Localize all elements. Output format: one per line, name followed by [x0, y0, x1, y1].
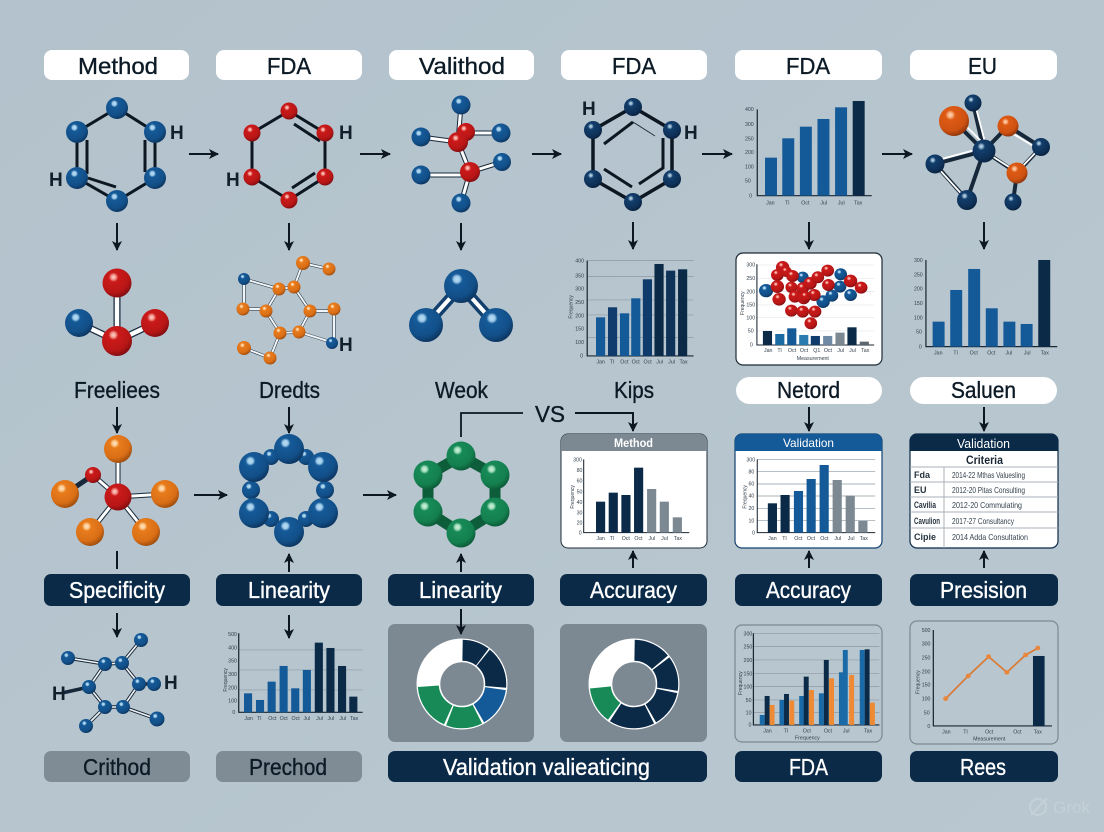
- panel: Validation chart: Tl: [782, 536, 787, 542]
- arrow: row 1 right 2: [360, 153, 390, 155]
- bar chart: EU: 100: [914, 315, 923, 321]
- pill: FDA 3: [735, 50, 882, 80]
- arrow: down to row 3 col 2: [288, 407, 290, 433]
- pill: Rees: [910, 751, 1058, 782]
- panel: Validation criteria table: Fda: [914, 470, 931, 480]
- pill: Linearity 2: [388, 574, 534, 606]
- pill: EU: [910, 50, 1057, 80]
- panel: Method chart: Jul: [648, 536, 655, 542]
- panel: scatter and bars: Oct: [788, 348, 797, 354]
- pill: Accuracy 1: Accuracy: [590, 577, 677, 603]
- pill: Prechod: Prechod: [249, 754, 327, 780]
- arrow: down col 6: [983, 222, 985, 249]
- bar chart: Prechod: [223, 632, 363, 722]
- panel: Validation criteria table: 2017-27 Consultancy: [952, 516, 1015, 526]
- arrow: row 3 right 2: [363, 494, 396, 496]
- pill: Accuracy 1: [560, 574, 707, 606]
- bar chart: EU: Jul: [1006, 350, 1012, 356]
- bar chart: Kips: Jan: [596, 360, 605, 366]
- bar chart: Kips: Frequency: [568, 295, 574, 319]
- panel: Validation chart: 300: [746, 457, 755, 463]
- molecule: orange ring: [236, 256, 353, 364]
- connector stem above Specificity: [116, 551, 118, 569]
- panel: scatter and bars: 150: [746, 303, 755, 309]
- bar chart: Prechod: Oct: [292, 716, 300, 722]
- bar chart: Kips: 0: [580, 353, 583, 359]
- panel: Validation chart: 40: [748, 494, 754, 500]
- bar chart: EU: 200: [914, 287, 923, 293]
- panel: Validation criteria table: Criteria: [966, 453, 1003, 467]
- molecule: red hexagon: [226, 102, 353, 208]
- panel: line and bar chart: Jan: [942, 730, 951, 736]
- panel: line and bar chart: 500: [922, 628, 931, 634]
- bar chart: Kips: Jul: [668, 360, 675, 366]
- bar chart: Kips: 300: [575, 287, 584, 293]
- panel: Validation criteria table: EU: [914, 485, 927, 495]
- bar chart: Prechod: 100: [228, 699, 237, 705]
- pill: Prechod: [216, 751, 362, 782]
- arrow: down to row 3 col 6: [983, 407, 985, 431]
- bar chart: FDA row 1: 0: [749, 193, 752, 199]
- molecule: red and blue trio: [65, 268, 169, 356]
- label: Kips: Kips: [614, 377, 654, 403]
- pill: Crithod: Crithod: [83, 754, 151, 780]
- panel: line and bar chart: Frequency: [915, 670, 922, 694]
- pill: EU: EU: [968, 53, 997, 79]
- VS comparison connector: VS: [535, 401, 565, 427]
- arrow: row 1 right 3: [532, 153, 561, 155]
- pill: Valithod: [389, 50, 534, 80]
- panel: Method chart: Jan: [596, 536, 605, 542]
- panel: Method chart: Tl: [610, 536, 614, 542]
- panel: grouped bar chart: Jan: [763, 729, 772, 735]
- panel: Validation chart: Jul: [834, 536, 841, 542]
- molecule: branched red and blue: [412, 96, 511, 212]
- pill: Validation valieaticing: Validation valieaticing: [443, 754, 650, 780]
- panel: Validation criteria table: 2012-20 Pitas Consulting: [952, 485, 1025, 495]
- molecule: blue hexagon: H: [170, 123, 184, 144]
- pill: Specificity: Specificity: [69, 577, 165, 603]
- pill: Rees: Rees: [960, 754, 1006, 780]
- bar chart: Prechod: 500: [228, 632, 237, 638]
- arrow: down col 5: [808, 222, 810, 249]
- bar chart: FDA row 1: Jul: [820, 201, 827, 207]
- bar chart: Prechod: Tax: [350, 716, 359, 722]
- panel: Method chart: 20: [577, 521, 583, 527]
- panel: Validation chart: Tax: [860, 536, 868, 542]
- panel: line and bar chart: 0: [927, 724, 930, 730]
- arrow: up to Method chart: [632, 551, 634, 568]
- pill: FDA 2: FDA: [612, 53, 657, 79]
- arrow: down to row 4 col 1: [116, 613, 118, 637]
- panel: scatter and bars: 50: [748, 329, 754, 335]
- panel: Method chart: [561, 434, 707, 548]
- panel: scatter and bars: 200: [746, 289, 755, 295]
- bar chart: FDA row 1: 300: [745, 122, 754, 128]
- panel: line and bar chart: Measurement: [973, 737, 1006, 743]
- panel: Method chart: 300: [573, 457, 582, 463]
- molecule: navy hexagon: [582, 98, 698, 211]
- bar chart: Prechod: 200: [228, 685, 237, 691]
- bar chart: Prechod: Frequency: [223, 668, 229, 692]
- bar chart: EU: Tl: [953, 350, 958, 356]
- bar chart: EU: 150: [914, 301, 923, 307]
- molecule: blue trio: [409, 269, 513, 342]
- panel: Validation chart: Oct: [794, 536, 803, 542]
- pill: FDA 1: [216, 50, 362, 80]
- panel: line and bar chart: 250: [922, 655, 931, 661]
- bar chart: FDA row 1: Tl: [785, 201, 789, 207]
- panel: line and bar chart: 150: [922, 683, 931, 689]
- panel: Method chart: 50: [577, 489, 583, 495]
- arrow: down col 3: [460, 223, 462, 250]
- panel: grouped bar chart: 250: [744, 645, 752, 651]
- panel: Method chart: 30: [577, 511, 583, 517]
- panel: grouped bar chart: Frequency: [738, 671, 744, 695]
- bar chart: Prechod: Oct: [280, 716, 288, 722]
- panel: scatter and bars: Jul: [849, 348, 856, 354]
- bar chart: EU: Oct: [970, 350, 978, 356]
- panel: line and bar chart: Tl: [963, 730, 968, 736]
- panel: Validation criteria table: Validation: [957, 436, 1010, 451]
- arrow: down to row 3 col 5: [808, 407, 810, 431]
- arrow: up to Validation chart: [808, 551, 810, 568]
- arrow: up to blue ring: [288, 554, 290, 572]
- bar chart: Prechod: 300: [228, 672, 237, 678]
- panel: scatter and bars: Oct: [800, 348, 809, 354]
- panel: scatter and bars: Q1: [813, 348, 820, 354]
- panel: Validation chart: 20: [748, 506, 754, 512]
- panel: Validation chart: 10: [748, 518, 754, 524]
- arrow: up to green ring: [460, 554, 462, 572]
- molecule: blue hexagon: [49, 97, 184, 212]
- molecule: red and orange star: [51, 435, 179, 546]
- VS comparison connector: [461, 401, 633, 437]
- panel: Validation criteria table: [910, 434, 1058, 548]
- bar chart: Prechod: Jul: [327, 716, 334, 722]
- bar chart: FDA row 1: 200: [745, 150, 754, 156]
- molecule: red hexagon: H: [339, 123, 353, 144]
- panel: grouped bar chart: 100: [744, 685, 752, 691]
- arrow: row 1 right 4: [702, 153, 732, 155]
- panel: Method chart: Tax: [674, 536, 682, 542]
- bar chart: FDA row 1: 250: [745, 137, 754, 143]
- panel: grouped bar chart: 10: [746, 711, 752, 717]
- watermark: Grok: [1030, 798, 1090, 817]
- panel: grouped bar chart: 50: [746, 698, 752, 704]
- panel: Validation chart: 60: [748, 482, 754, 488]
- pill: Saluen: [910, 377, 1057, 404]
- panel: scatter and bars: 0: [750, 343, 753, 349]
- panel: scatter and bars: Measurement: [797, 356, 829, 362]
- pill: Method: [44, 50, 189, 80]
- panel: Method chart: 80: [577, 468, 583, 474]
- panel: Method chart: Frequency: [570, 485, 576, 509]
- panel: line and bar chart: 100: [922, 697, 931, 703]
- bar chart: Kips: Oct: [632, 360, 640, 366]
- molecule: orange ring: H: [339, 335, 353, 356]
- pill: Accuracy 2: [735, 574, 882, 606]
- pill: Presision: Presision: [940, 577, 1027, 603]
- bar chart: Kips: Tax: [679, 360, 688, 366]
- label: Freeliees: Freeliees: [74, 377, 160, 403]
- label: Weok: Weok: [435, 377, 488, 403]
- panel: grouped bar chart: Frequency: [795, 735, 820, 741]
- pill: Valithod: Valithod: [419, 53, 505, 79]
- pill: Presision: [910, 574, 1058, 606]
- bar chart: Prechod: Jul: [304, 716, 310, 722]
- arrow: down into donut panel: [460, 609, 462, 634]
- pill: FDA 1: FDA: [267, 53, 312, 79]
- bar chart: FDA row 1: 400: [745, 107, 754, 113]
- panel: grouped bar chart: Tax: [864, 729, 873, 735]
- pill: Crithod: [44, 751, 190, 782]
- pill: Method: Method: [78, 53, 158, 79]
- panel: scatter and bars: 300: [746, 263, 755, 269]
- panel: donut chart 1: [388, 624, 534, 742]
- panel: grouped bar chart: [735, 625, 882, 742]
- panel: scatter and bars: Tl: [777, 348, 782, 354]
- bar chart: Kips: Jul: [656, 360, 663, 366]
- panel: line and bar chart: 300: [922, 642, 931, 648]
- bar chart: EU: 300: [914, 258, 923, 264]
- molecule: red hexagon: H: [226, 170, 240, 191]
- panel: Validation chart: Frequency: [742, 485, 748, 509]
- panel: scatter and bars: 100: [746, 315, 755, 321]
- bar chart: Kips: 350: [575, 273, 584, 279]
- panel: grouped bar chart: Oct: [803, 729, 811, 735]
- bar chart: EU: [914, 258, 1057, 356]
- bar chart: EU: 0: [919, 344, 922, 350]
- panel: Validation chart: [735, 434, 882, 548]
- panel: line and bar chart: 200: [922, 669, 931, 675]
- panel: grouped bar chart: 200: [744, 658, 752, 664]
- bar chart: Prechod: 400: [228, 645, 237, 651]
- pill: FDA 2: [561, 50, 707, 80]
- panel: Validation chart: Jul: [848, 536, 855, 542]
- bar chart: Kips: 150: [575, 327, 584, 333]
- arrow: down col 2: [288, 223, 290, 250]
- pill: Saluen: Saluen: [951, 377, 1016, 403]
- molecule: navy hexagon: H: [582, 99, 596, 120]
- bar chart: Prechod: Tl: [257, 716, 261, 722]
- bar chart: Prechod: Jan: [244, 716, 253, 722]
- arrow: up to criteria table: [983, 551, 985, 568]
- molecule: blue hexagon small: [52, 633, 178, 733]
- label: Dredts: Dredts: [259, 377, 320, 403]
- pill: Netord: Netord: [777, 377, 840, 403]
- bar chart: EU: Tax: [1041, 350, 1049, 356]
- panel: Method chart: Method: [614, 436, 653, 450]
- pill: Linearity 1: [216, 574, 362, 606]
- panel: scatter and bars: [736, 253, 882, 365]
- molecule: green ring: [414, 442, 510, 548]
- watermark: Grok: Grok: [1053, 798, 1090, 817]
- top header pills: [44, 50, 1057, 80]
- bar chart: Kips: 200: [575, 313, 584, 319]
- bar chart: Kips: 400: [575, 259, 584, 265]
- bar chart: Kips: 250: [575, 300, 584, 306]
- bar chart: FDA row 1: Tax: [854, 201, 863, 207]
- bar chart: Prechod: Jul: [316, 716, 323, 722]
- panel: Validation chart: Validation: [783, 436, 834, 450]
- panel: Validation criteria table: Cavilia: [914, 500, 937, 510]
- panel: grouped bar chart: Tl: [784, 729, 788, 735]
- pill: Linearity 2: Linearity: [419, 577, 502, 603]
- panel: line and bar chart: [910, 621, 1058, 744]
- panel: scatter and bars: Frequency: [740, 291, 746, 315]
- arrow: down to row 3 col 1: [116, 407, 118, 433]
- bar chart: FDA row 1: 100: [745, 164, 754, 170]
- panel: line and bar chart: Oct: [1013, 730, 1022, 736]
- molecule: blue ring: [239, 434, 338, 547]
- molecule: navy hexagon: H: [684, 123, 698, 144]
- panel: line and bar chart: 50: [924, 710, 930, 716]
- panel: grouped bar chart: Oct: [824, 729, 833, 735]
- bar chart: FDA row 1: Jul: [838, 201, 845, 207]
- bar chart: Prechod: Jul: [339, 716, 346, 722]
- bar chart: EU: Oct: [987, 350, 996, 356]
- panel: Validation criteria table: Cavulion: [914, 516, 940, 526]
- panel: donut chart 2: [560, 624, 707, 742]
- bar chart: Kips: Oct: [644, 360, 652, 366]
- panel: line and bar chart: Oct: [985, 730, 994, 736]
- panel: Validation chart: 0: [752, 531, 755, 537]
- bar chart: Prechod: 350: [228, 659, 237, 665]
- panel: scatter and bars: 250: [746, 276, 755, 282]
- arrow: down col 1: [116, 223, 118, 250]
- panel: Validation criteria table: 2014-22 Mthas Valuesling: [952, 470, 1025, 480]
- pill: FDA bottom: [735, 751, 882, 782]
- panel: Method chart: 40: [577, 500, 583, 506]
- bar chart: Kips: 100: [575, 340, 584, 346]
- pill: FDA bottom: FDA: [789, 754, 829, 780]
- pill: Linearity 1: Linearity: [248, 577, 330, 603]
- bar chart: EU: 250: [914, 272, 923, 278]
- panel: grouped bar chart: Jul: [843, 729, 850, 735]
- bar chart: FDA row 1: Jan: [766, 201, 775, 207]
- molecule: blue hexagon small: H: [52, 684, 66, 705]
- arrow: row 1 right 1: [189, 153, 218, 155]
- bar chart: Kips: [568, 259, 694, 366]
- molecule: blue hexagon small: H: [164, 673, 178, 694]
- bar chart: EU: 50: [916, 330, 922, 336]
- pill: Netord: [736, 377, 882, 404]
- bar chart: Prechod: 0: [232, 710, 235, 716]
- bar chart: FDA row 1: [745, 101, 872, 207]
- bar chart: Kips: Oct: [620, 360, 629, 366]
- pill: FDA 3: FDA: [786, 53, 831, 79]
- bar chart: Kips: Tl: [610, 360, 614, 366]
- panel: scatter and bars: Oct: [824, 348, 833, 354]
- panel: line and bar chart: Tax: [1034, 730, 1042, 736]
- bar chart: FDA row 1: 50: [745, 178, 751, 184]
- panel: Method chart: 0: [579, 531, 582, 537]
- panel: Validation criteria table: 2012-20 Commulating: [952, 500, 1022, 510]
- arrow: down to row 4 col 2: [288, 615, 290, 638]
- panel: scatter and bars: Tax: [861, 348, 870, 354]
- panel: Validation criteria table: 2014 Adda Consultation: [952, 532, 1028, 542]
- arrow: row 3 right 1: [194, 494, 227, 496]
- panel: Validation chart: Jan: [768, 536, 777, 542]
- arrow: row 1 right 5: [882, 153, 912, 155]
- panel: Method chart: 60: [577, 479, 583, 485]
- panel: Validation chart: Oct: [820, 536, 829, 542]
- molecule: navy and orange network: [926, 94, 1050, 210]
- panel: scatter and bars: Jul: [837, 348, 844, 354]
- bar chart: Prechod: Oct: [268, 716, 277, 722]
- bar chart: EU: Jan: [934, 350, 943, 356]
- arrow: down col 4: [632, 222, 634, 249]
- panel: Validation criteria table: Cipie: [914, 532, 936, 542]
- panel: Method chart: Oct: [634, 536, 643, 542]
- pill: Validation valieaticing: [388, 751, 707, 782]
- panel: Method chart: Jul: [661, 536, 668, 542]
- molecule: blue hexagon: H: [49, 170, 63, 191]
- panel: grouped bar chart: 150: [744, 671, 752, 677]
- bar chart: FDA row 1: Oct: [801, 201, 810, 207]
- panel: scatter and bars: Jan: [764, 348, 773, 354]
- panel: grouped bar chart: 0: [748, 723, 752, 729]
- bar chart: EU: Jul: [1024, 350, 1031, 356]
- pill: Specificity: [44, 574, 190, 606]
- panel: Validation chart: 80: [748, 469, 754, 475]
- panel: Validation chart: Oct: [807, 536, 816, 542]
- panel: Method chart: Oct: [622, 536, 630, 542]
- panel: grouped bar chart: 300: [744, 631, 752, 637]
- pill: Accuracy 2: Accuracy: [766, 577, 851, 603]
